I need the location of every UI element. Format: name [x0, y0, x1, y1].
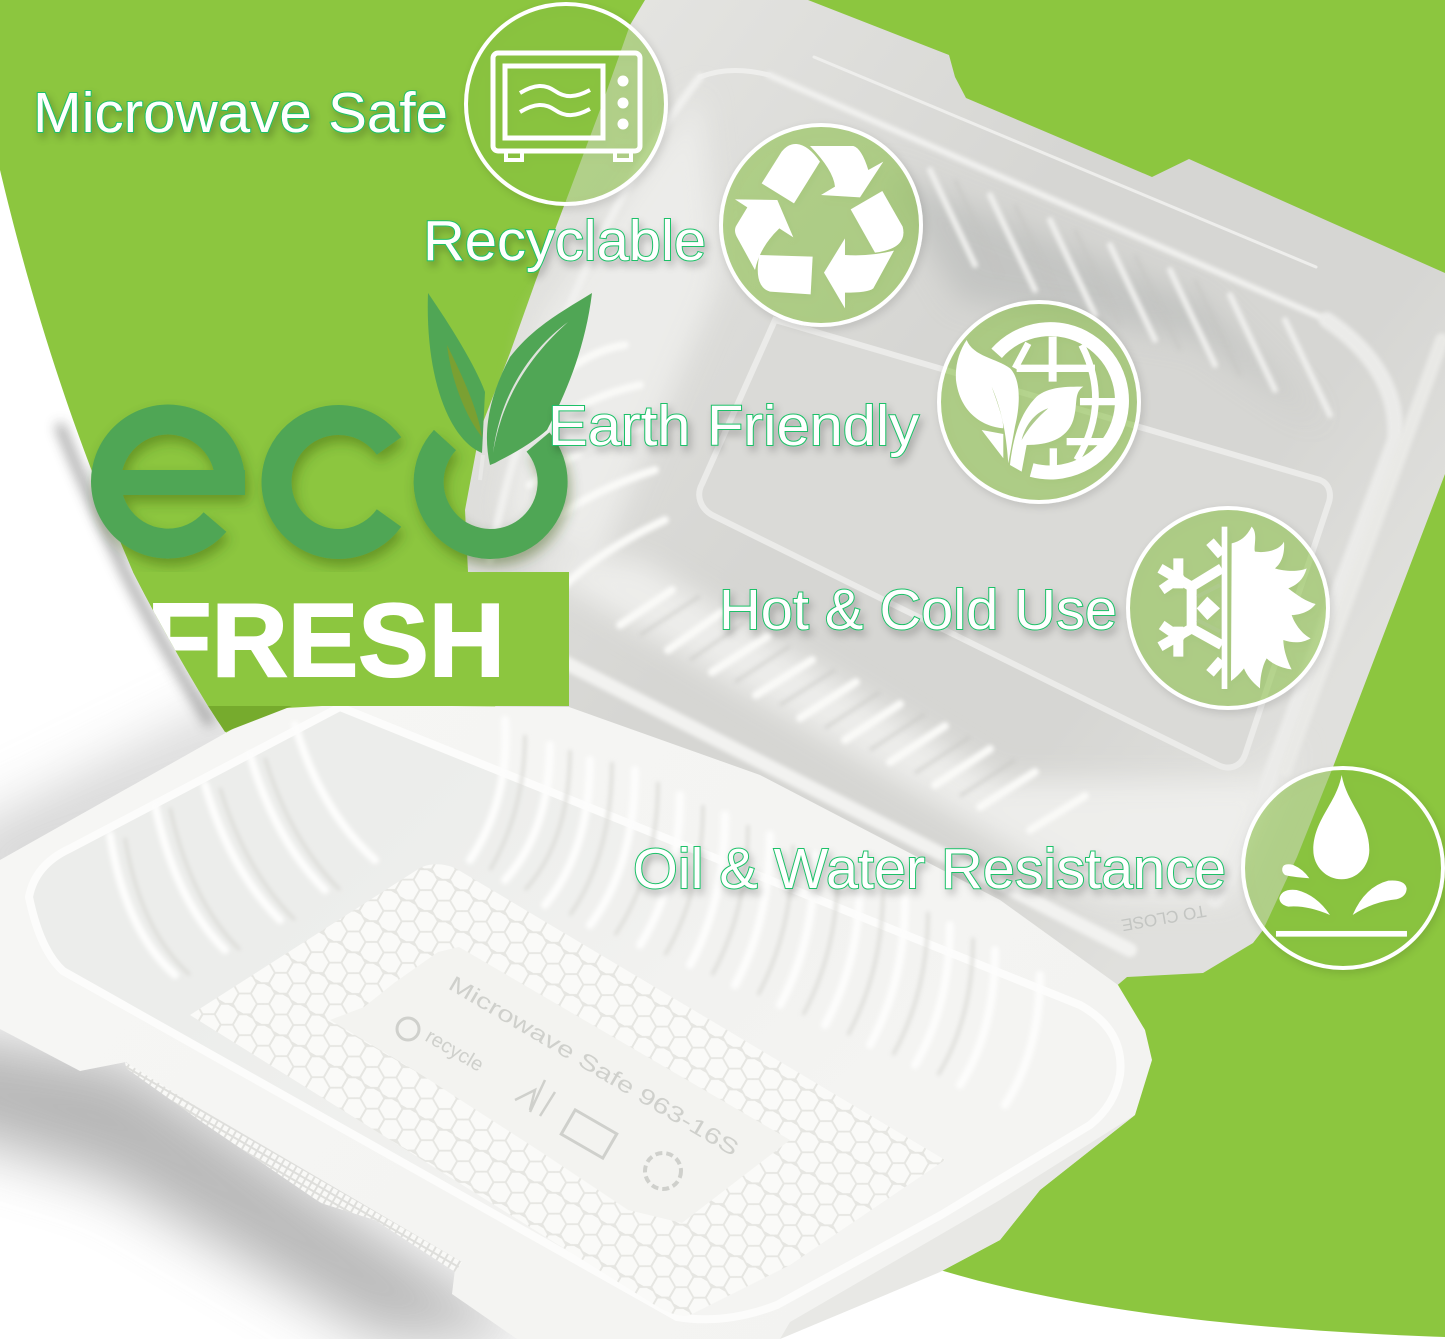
badge: hot and cold use — [1128, 508, 1328, 708]
badge: oil and water resistance — [1243, 768, 1443, 968]
tray lower right wall — [780, 1115, 1135, 1339]
tray hinge texture — [125, 1062, 462, 1272]
eco wordmark — [106, 420, 553, 544]
icon: microwave — [493, 53, 640, 160]
icon: recycle arrows — [735, 144, 903, 308]
tray inner wall — [29, 707, 1120, 1319]
label: hot and cold use: Hot & Cold Use — [719, 578, 1117, 642]
label: microwave safe: Microwave Safe — [33, 81, 448, 145]
icon: globe and leaves — [956, 329, 1122, 472]
badge: recyclable — [721, 125, 921, 325]
logo leaves — [428, 293, 592, 480]
eco fresh logo — [106, 293, 592, 732]
icon: snowflake and sun — [1160, 527, 1316, 689]
embossed stamp area: Microwave Safe 963-16S — [444, 971, 743, 1161]
lid embossed text: TO CLOSE — [1120, 901, 1208, 935]
fresh banner: FRESH — [147, 583, 505, 699]
honeycomb tray base — [190, 864, 945, 1316]
soft shadow around container — [0, 690, 540, 1339]
embossed stamp area: recycle — [421, 1025, 487, 1076]
label: recyclable: Recyclable — [423, 209, 706, 273]
container tray — [0, 705, 1152, 1339]
label: oil and water resistance: Oil & Water Resistance — [633, 837, 1226, 901]
lid ribs — [530, 345, 1085, 830]
badge: earth friendly — [939, 302, 1139, 502]
icon: water drop and splash — [1276, 775, 1407, 937]
lid fold shadows — [500, 90, 1320, 900]
badge: microwave safe — [466, 4, 666, 204]
fresh banner — [133, 572, 569, 732]
tray ribs — [110, 720, 1040, 1105]
container lid — [465, 0, 1445, 1000]
lid inner panel — [699, 320, 1330, 768]
lid rim — [490, 57, 1442, 950]
embossed stamp area — [330, 947, 790, 1223]
label: earth friendly: Earth Friendly — [548, 394, 920, 458]
